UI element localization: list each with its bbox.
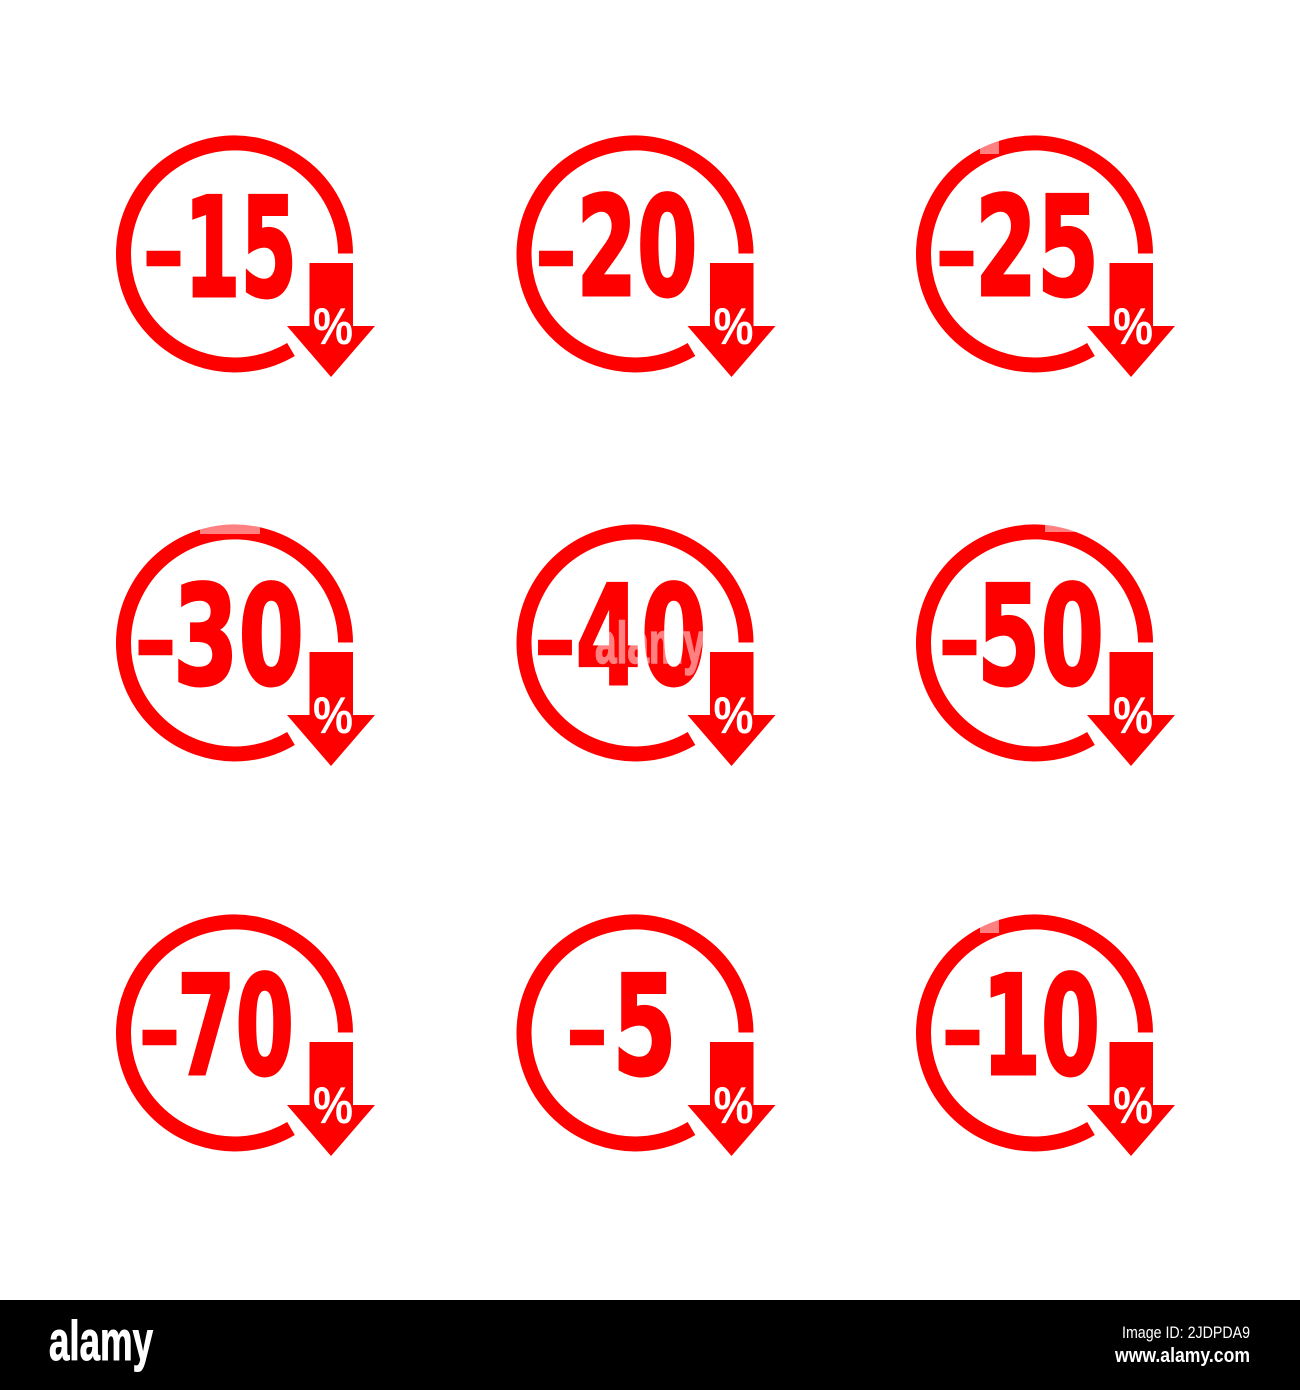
number xyxy=(568,946,676,1107)
footer logo: alamy xyxy=(49,1309,153,1372)
down arrow with percent xyxy=(1087,263,1175,377)
number: – xyxy=(944,951,981,1103)
number: 20 xyxy=(576,167,698,328)
down arrow with percent xyxy=(688,652,776,766)
down arrow with percent xyxy=(688,263,776,377)
down arrow with percent: % xyxy=(1113,687,1153,745)
down arrow with percent: % xyxy=(313,687,353,745)
number: 70 xyxy=(177,946,294,1107)
ring arc xyxy=(124,922,345,1144)
number: 10 xyxy=(982,946,1100,1107)
ring arc xyxy=(524,922,746,1144)
footer bar xyxy=(0,1300,1300,1390)
number xyxy=(538,167,698,328)
down arrow with percent: % xyxy=(313,1077,353,1135)
down arrow with percent xyxy=(1087,652,1175,766)
down arrow with percent xyxy=(287,1042,375,1156)
number: 5 xyxy=(612,946,676,1107)
number: – xyxy=(938,172,975,324)
number: – xyxy=(141,951,178,1103)
number: 50 xyxy=(977,556,1104,717)
number: – xyxy=(941,561,978,713)
down arrow with percent xyxy=(688,1042,776,1156)
badge: minus 15 percent xyxy=(124,143,375,377)
down arrow with percent: % xyxy=(1113,1077,1153,1135)
down arrow with percent xyxy=(287,263,375,377)
watermark: alamy xyxy=(595,611,705,676)
badge: minus 5 percent xyxy=(524,922,776,1156)
ring arc xyxy=(524,532,746,754)
badge: minus 50 percent xyxy=(924,532,1175,766)
badge: minus 70 percent xyxy=(124,922,375,1156)
number xyxy=(944,946,1100,1107)
number xyxy=(137,556,304,717)
watermark xyxy=(200,140,1090,933)
badge: minus 25 percent xyxy=(924,143,1175,377)
number: 40 xyxy=(576,556,706,717)
number: – xyxy=(536,561,574,713)
ring arc xyxy=(924,922,1146,1144)
down arrow with percent xyxy=(287,652,375,766)
down arrow with percent: % xyxy=(714,687,754,745)
number xyxy=(141,946,294,1107)
badge: minus 40 percent xyxy=(524,532,776,766)
badge: minus 10 percent xyxy=(924,922,1175,1156)
ring arc xyxy=(924,143,1146,365)
down arrow with percent xyxy=(1087,1042,1175,1156)
ring arc xyxy=(524,143,746,365)
number xyxy=(938,167,1099,328)
number: 15 xyxy=(184,168,297,329)
number xyxy=(145,168,297,329)
number: 30 xyxy=(173,556,304,717)
ring arc xyxy=(924,532,1146,754)
down arrow with percent: % xyxy=(1113,298,1153,356)
number xyxy=(941,556,1104,717)
ring arc xyxy=(124,143,345,365)
number: – xyxy=(568,951,606,1103)
number: 25 xyxy=(975,167,1099,328)
badge: minus 20 percent xyxy=(524,143,776,377)
image id: Image ID: 2JDPDA9 xyxy=(1122,1323,1250,1342)
number xyxy=(536,556,706,717)
number: – xyxy=(145,172,182,324)
number: – xyxy=(538,172,574,324)
down arrow with percent: % xyxy=(714,298,754,356)
number: – xyxy=(137,561,174,713)
down arrow with percent: % xyxy=(313,298,353,356)
ring arc xyxy=(124,532,345,754)
website: www.alamy.com xyxy=(1114,1345,1250,1367)
badge: minus 30 percent xyxy=(124,532,375,766)
down arrow with percent: % xyxy=(714,1077,754,1135)
